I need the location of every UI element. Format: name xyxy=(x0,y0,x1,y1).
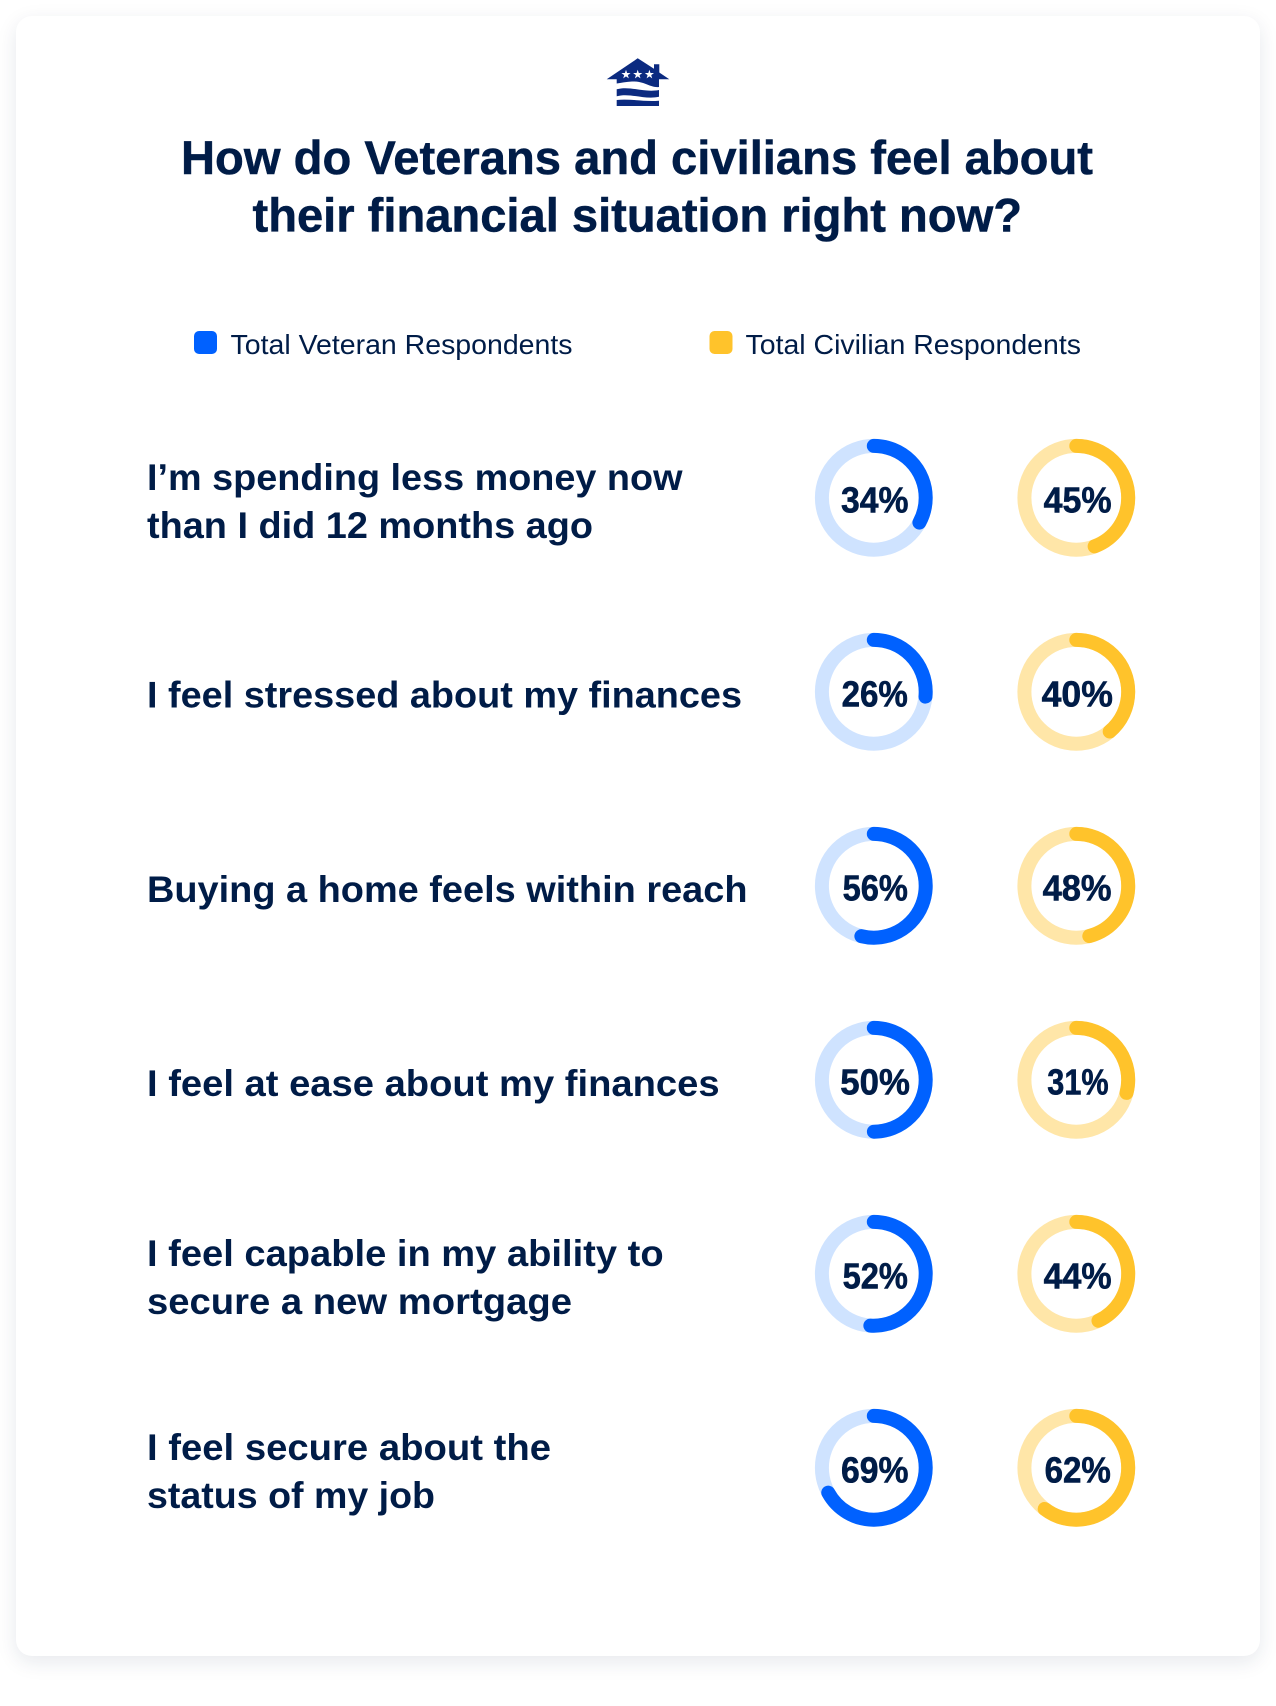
icon: house logo xyxy=(607,58,669,106)
legend label: civilian: Total Civilian Respondents xyxy=(746,329,1081,360)
row: secure job xyxy=(147,1416,1128,1520)
donut: veteran 52%: 52% xyxy=(843,1256,908,1297)
donut: veteran 56% xyxy=(822,834,926,938)
row label: I feel stressed about my finances xyxy=(147,675,742,716)
donut: civilian 40%: 40% xyxy=(1042,674,1113,715)
donut: civilian 31%: 31% xyxy=(1047,1062,1109,1103)
row label: I feel capable in my ability to xyxy=(147,1233,664,1274)
donut: veteran 34%: 34% xyxy=(841,480,908,521)
donut: civilian 31% xyxy=(1024,1028,1128,1132)
donut: veteran 50% xyxy=(822,1028,926,1132)
row label xyxy=(147,1427,551,1516)
row label: I feel secure about the xyxy=(147,1427,551,1468)
donut: veteran 34% xyxy=(822,446,926,550)
row label: I’m spending less money now xyxy=(147,457,683,498)
title xyxy=(181,131,1093,242)
donut: civilian 44%: 44% xyxy=(1044,1256,1112,1297)
row: buying a home xyxy=(147,834,1128,938)
row: stressed about finances xyxy=(147,640,1128,744)
donut: veteran 50%: 50% xyxy=(840,1062,910,1103)
row label: secure a new mortgage xyxy=(147,1281,572,1322)
donut: civilian 45%: 45% xyxy=(1044,480,1112,521)
donut: civilian 45% xyxy=(1024,446,1128,550)
row label xyxy=(147,457,683,546)
row: spending less money xyxy=(147,446,1128,550)
row: at ease about finances xyxy=(147,1028,1128,1132)
donut: veteran 26%: 26% xyxy=(842,674,908,715)
donut: civilian 48% xyxy=(1024,834,1128,938)
donut: veteran 69% xyxy=(822,1416,926,1520)
row label: I feel at ease about my finances xyxy=(147,1063,720,1104)
donut: civilian 62%: 62% xyxy=(1045,1450,1111,1491)
donut: veteran 26% xyxy=(822,640,926,744)
legend label: veteran: Total Veteran Respondents xyxy=(230,329,572,360)
donut: civilian 44% xyxy=(1024,1222,1128,1326)
donut: civilian 48%: 48% xyxy=(1043,868,1112,909)
donut: civilian 62% xyxy=(1024,1416,1128,1520)
title: How do Veterans and civilians feel about xyxy=(181,131,1093,184)
donut: veteran 56%: 56% xyxy=(843,868,908,909)
title: their financial situation right now? xyxy=(252,188,1022,242)
row: capable of securing mortgage xyxy=(147,1222,1128,1326)
row label: than I did 12 months ago xyxy=(147,505,593,546)
row label xyxy=(147,1233,664,1322)
row label: Buying a home feels within reach xyxy=(147,869,748,910)
row label: status of my job xyxy=(147,1475,435,1516)
legend xyxy=(194,329,1081,360)
legend swatch: veteran xyxy=(194,331,217,354)
donut: civilian 40% xyxy=(1024,640,1128,744)
donut: veteran 52% xyxy=(822,1222,926,1326)
legend swatch: civilian xyxy=(710,331,732,354)
donut: veteran 69%: 69% xyxy=(841,1450,908,1491)
